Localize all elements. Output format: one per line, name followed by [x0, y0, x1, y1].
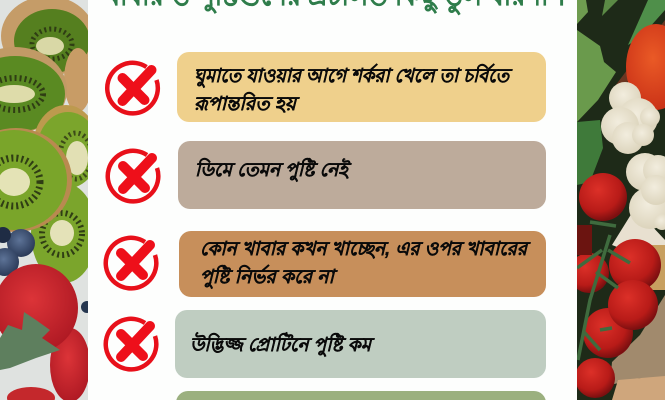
- card text: কোন খাবার কখন খাচ্ছেন, এর ওপর খাবারের: [200, 239, 531, 260]
- card text: ডিমে তেমন পুষ্টি নেই: [195, 157, 352, 182]
- photo: kiwi, blueberries and strawberries (left): [0, 0, 99, 400]
- card: [179, 231, 546, 297]
- row 5: card (cropped at the frame edge): [176, 391, 546, 400]
- icon: red cross: [106, 238, 156, 288]
- card text: রূপান্তরিত হয়: [194, 91, 300, 115]
- card: [178, 141, 546, 209]
- card: [175, 310, 546, 378]
- white content panel: [88, 0, 577, 400]
- icon: red cross: [108, 151, 158, 201]
- row 3: myth: [106, 231, 546, 297]
- card text: উদ্ভিজ্জ প্রোটিনে পুষ্টি কম: [190, 332, 375, 357]
- card text: পুষ্টি নির্ভর করে না: [200, 264, 338, 289]
- row 1: myth: [107, 52, 546, 122]
- icon: red cross: [107, 63, 158, 113]
- icon: red cross: [106, 319, 156, 369]
- row 2: myth: [108, 141, 546, 209]
- card text: ঘুমাতে যাওয়ার আগে শর্করা খেলে তা চর্বিতে: [194, 63, 513, 88]
- row 4: myth: [106, 310, 546, 378]
- photo: vegetables (right): [569, 0, 665, 400]
- card: [177, 52, 546, 122]
